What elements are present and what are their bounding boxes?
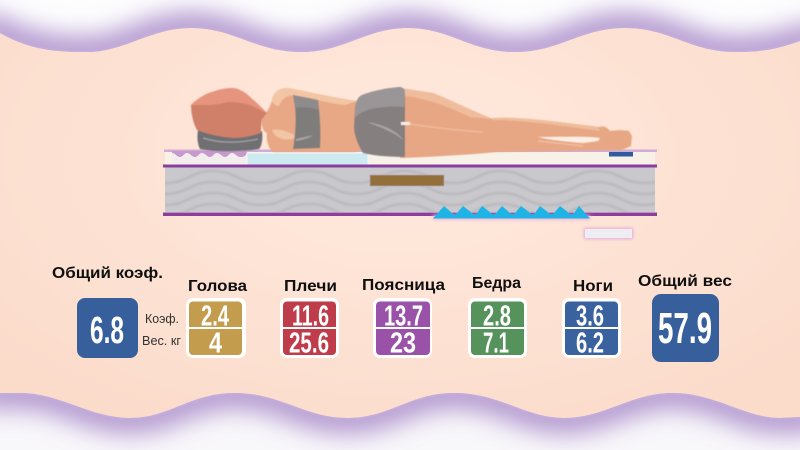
mattress top comfort layer <box>165 151 655 165</box>
card: hips: 7.1 <box>483 328 509 360</box>
grey top <box>293 95 320 149</box>
label: Общий вес: Общий вес <box>638 273 732 290</box>
grey shorts <box>354 87 405 157</box>
torso <box>262 88 362 152</box>
card: legs: 3.6 <box>576 300 604 332</box>
sleeping figure <box>191 87 632 158</box>
light blue foam insert <box>247 153 368 165</box>
top wave band <box>0 0 800 52</box>
egg-crate foam insert <box>172 151 247 164</box>
shorts highlight <box>355 87 405 118</box>
label: Общий коэф.: Общий коэф. <box>52 265 163 282</box>
legs <box>400 88 632 158</box>
blue wavy foam insert <box>433 206 590 220</box>
shin crease <box>538 141 583 146</box>
torso highlight <box>272 88 357 140</box>
pillow top highlight <box>191 88 267 113</box>
grey top upper band <box>293 95 319 110</box>
card: hips: 2.8 <box>483 300 511 332</box>
white latex insert <box>584 228 633 239</box>
grey pillow <box>197 130 262 151</box>
label: Поясница: Поясница <box>362 277 445 294</box>
mattress upper purple line <box>163 164 657 168</box>
quilted waves <box>165 170 655 212</box>
box: total weight: 57.9 <box>658 304 712 353</box>
mattress <box>163 150 657 216</box>
gap between shins <box>538 137 600 143</box>
pillow under head <box>191 88 267 138</box>
card: shoulders <box>280 298 339 360</box>
mattress lower purple line <box>163 212 657 216</box>
spring core <box>165 167 655 212</box>
mattress top trim <box>164 150 657 152</box>
label: Голова: Голова <box>188 278 247 295</box>
card: lower back: 13.7 <box>384 300 423 332</box>
card: shoulders: 25.6 <box>289 328 329 360</box>
card: head <box>186 298 246 360</box>
card: head: 2.4 <box>201 300 229 332</box>
card: lower back: 23 <box>390 328 416 360</box>
blue foot insert <box>609 152 633 156</box>
box: total coefficient: 6.8 <box>90 310 124 352</box>
card: legs: 6.2 <box>576 328 604 360</box>
label: Коэф.: Коэф. <box>145 312 179 326</box>
card: lower back <box>373 298 432 360</box>
pillow highlight line <box>203 138 258 142</box>
card: shoulders: 11.6 <box>292 300 329 332</box>
label: Бедра: Бедра <box>472 275 521 292</box>
shorts crescent <box>367 122 404 141</box>
label: Вес. кг: Вес. кг <box>142 334 181 348</box>
bottom wave band <box>0 393 800 450</box>
card: hips <box>468 298 527 360</box>
leg highlight <box>400 88 600 131</box>
box: total coefficient <box>77 298 138 358</box>
grey top highlight <box>296 135 313 141</box>
label: Плечи: Плечи <box>284 278 337 295</box>
brown coconut insert <box>370 175 444 186</box>
hip gap <box>401 122 410 125</box>
thigh crease <box>402 123 483 132</box>
card: head: 4 <box>209 328 222 360</box>
box: total weight <box>652 294 719 362</box>
label: Ноги: Ноги <box>573 278 613 295</box>
card: legs <box>562 298 621 360</box>
